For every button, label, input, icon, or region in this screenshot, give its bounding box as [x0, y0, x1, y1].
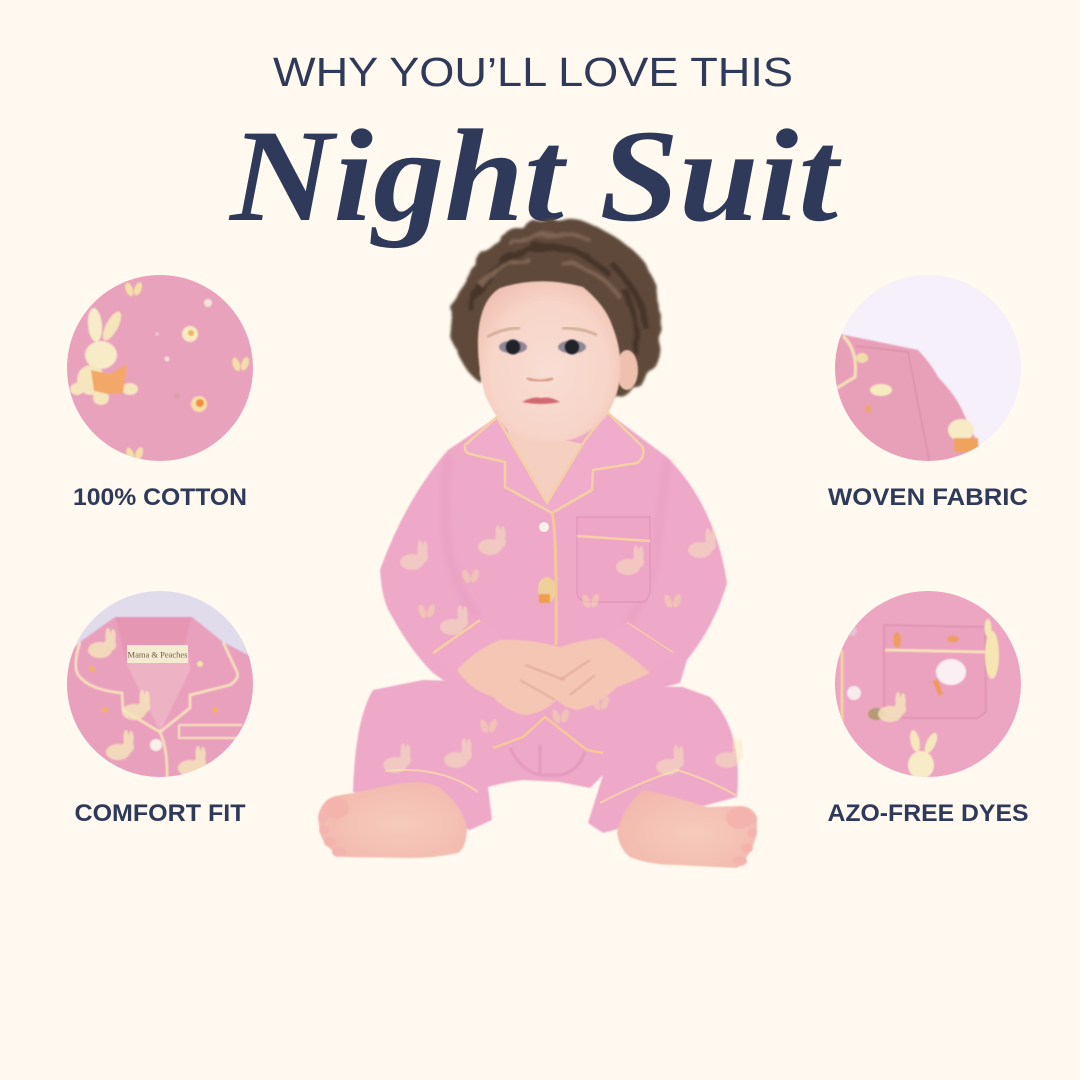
title: night suit: Night Suit — [228, 102, 842, 249]
flower — [182, 326, 198, 342]
detail circle: woven fabric — [835, 275, 1021, 461]
hair — [450, 219, 661, 400]
eyebrows — [487, 328, 597, 337]
heading: why you'll love this: WHY YOU’LL LOVE THIS — [273, 49, 793, 95]
rabbit print motifs — [383, 525, 743, 775]
illustration: seated toddler in pink pyjamas — [318, 219, 757, 868]
sleeve folds — [445, 455, 667, 622]
face — [478, 281, 620, 443]
right foot — [617, 790, 757, 868]
cuffs — [433, 620, 673, 673]
pyjama trousers — [353, 680, 738, 833]
leaf sprigs — [124, 281, 251, 462]
centre floral motif — [538, 577, 556, 603]
pyjama jacket — [380, 412, 727, 753]
jacket hem piping — [493, 717, 603, 753]
crotch folds — [510, 745, 585, 775]
neck — [505, 430, 593, 510]
placket piping — [552, 513, 556, 645]
detail circle: comfort fit — [67, 591, 253, 777]
left foot — [318, 782, 467, 858]
label: azo-free dyes: AZO-FREE DYES — [828, 800, 1028, 827]
trouser hem piping — [385, 770, 737, 803]
collar — [465, 412, 643, 513]
label: woven fabric: WOVEN FABRIC — [828, 484, 1028, 511]
detail circle: 100% cotton — [67, 275, 253, 461]
bunny reading a book — [70, 307, 138, 405]
buttons — [539, 522, 549, 590]
brand tag — [127, 645, 188, 663]
brand tag: Mama & Peaches — [128, 650, 187, 660]
ear — [616, 350, 638, 390]
orange flower — [191, 396, 207, 412]
nose — [527, 378, 553, 381]
detail circle: azo-free dyes — [835, 591, 1021, 777]
mouth — [522, 398, 560, 404]
hands — [457, 638, 650, 715]
finger lines — [520, 660, 595, 700]
label: 100% cotton: 100% COTTON — [73, 484, 247, 511]
eyes — [499, 340, 586, 354]
pocket — [577, 517, 650, 602]
label: comfort fit: COMFORT FIT — [74, 800, 246, 827]
